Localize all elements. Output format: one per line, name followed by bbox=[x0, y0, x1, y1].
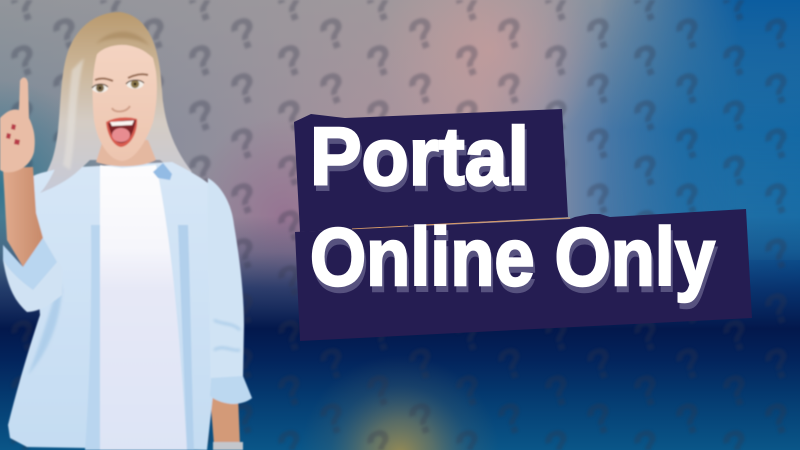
left sleeve bbox=[3, 238, 62, 312]
hair highlight bbox=[63, 58, 84, 170]
collar bbox=[153, 163, 172, 180]
left cuff bbox=[3, 238, 57, 290]
mouth bbox=[106, 117, 137, 147]
woman pointing up bbox=[0, 12, 252, 450]
nose bbox=[112, 106, 130, 112]
face bbox=[93, 45, 157, 161]
shirt placket left bbox=[85, 225, 100, 450]
hair top shade bbox=[96, 32, 150, 46]
title: Online Only: Online Only bbox=[312, 218, 717, 309]
seam highlight bbox=[352, 218, 570, 229]
title: Portal: Portal bbox=[312, 117, 531, 208]
title: Portal: Portal bbox=[310, 112, 529, 202]
rolled right sleeve bbox=[208, 178, 252, 404]
hair back bbox=[33, 12, 192, 198]
eyebrows bbox=[95, 74, 148, 81]
sleeve folds bbox=[214, 320, 240, 350]
raised left arm bbox=[3, 167, 43, 267]
right forearm bbox=[210, 395, 240, 445]
hair fringe bbox=[40, 13, 159, 193]
title panel: Portal bbox=[294, 109, 568, 232]
shirt body bbox=[8, 162, 230, 450]
left fist with raised finger bbox=[0, 77, 35, 172]
right cuff bbox=[210, 376, 252, 404]
eyes bbox=[92, 79, 144, 93]
shirt placket right bbox=[178, 225, 194, 450]
bracelet bbox=[213, 442, 243, 450]
title panel: Online Only bbox=[295, 209, 752, 341]
shirt shading bbox=[28, 280, 62, 375]
white t-shirt bbox=[97, 165, 187, 450]
title: Online Only: Online Only bbox=[310, 212, 715, 303]
neck bbox=[96, 140, 156, 166]
nails bbox=[6, 124, 20, 145]
